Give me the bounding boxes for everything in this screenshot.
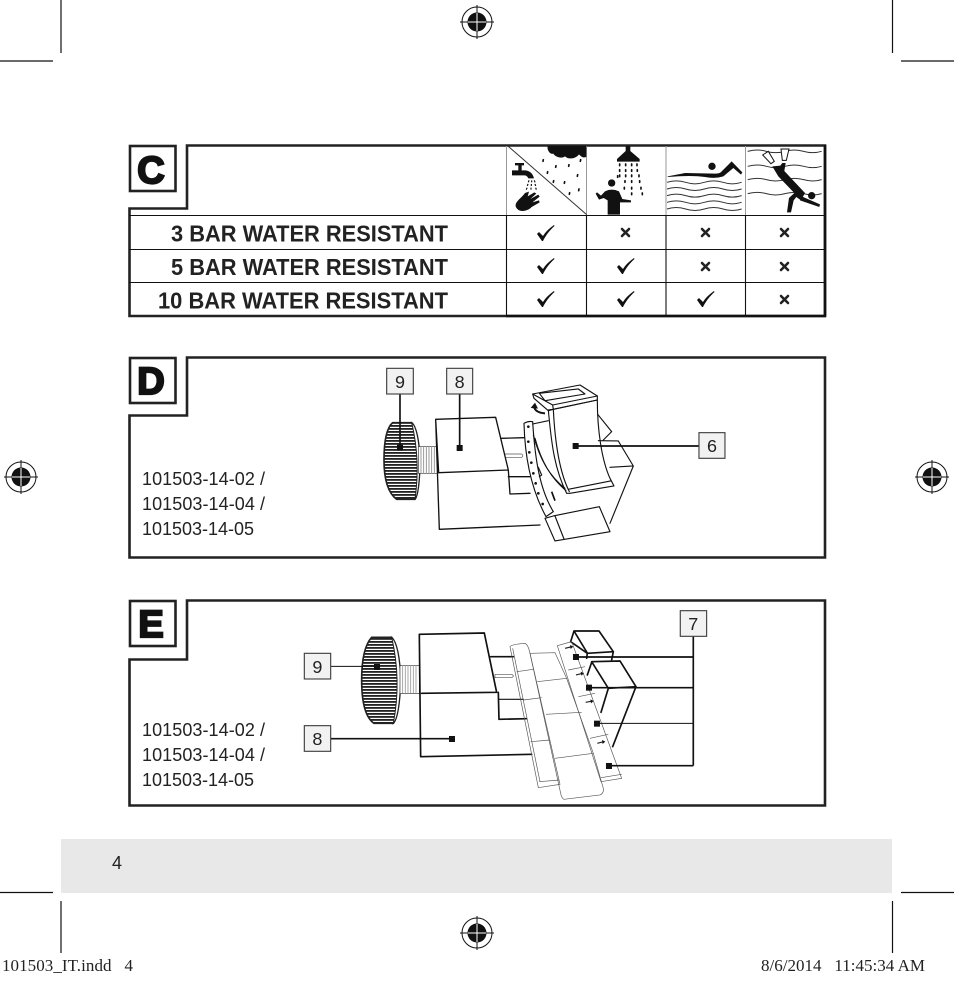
slug: file name: 101503_IT.indd 4 bbox=[2, 956, 134, 975]
callout 9: 9 bbox=[312, 657, 322, 677]
icon: shower bbox=[596, 146, 642, 215]
row: 3 bar: 3 BAR WATER RESISTANT bbox=[171, 220, 448, 246]
diagram: tool body with knob bbox=[384, 417, 540, 529]
lower strap bbox=[545, 507, 610, 541]
panel E letter bbox=[130, 601, 176, 646]
knob bbox=[362, 637, 401, 723]
row: 10 bar: 10 BAR WATER RESISTANT bbox=[158, 288, 448, 314]
callout 8 bbox=[304, 726, 455, 751]
callout 7: 7 bbox=[688, 614, 698, 634]
icon: tap and rain bbox=[508, 146, 587, 215]
callout 7 bbox=[573, 611, 707, 769]
registration mark: right bbox=[915, 460, 949, 494]
threaded screw bbox=[418, 447, 437, 473]
threaded screw bbox=[400, 666, 419, 694]
panel E letter: E bbox=[138, 604, 164, 646]
row: 3 bar bbox=[171, 220, 788, 246]
diagram: tool body with knob bbox=[362, 633, 532, 757]
middle strap bbox=[530, 653, 603, 799]
watch case bbox=[533, 385, 614, 493]
callout 9: 9 bbox=[395, 372, 405, 392]
left strap bbox=[510, 643, 560, 788]
diagram: watch on strap bbox=[524, 385, 633, 541]
panel E frame bbox=[130, 600, 825, 806]
panel E model numbers bbox=[142, 720, 265, 790]
icon: swimmer and waves bbox=[667, 161, 742, 210]
panel C letter: C bbox=[137, 150, 165, 192]
callout 8 bbox=[447, 368, 473, 451]
registration mark: left bbox=[4, 460, 38, 494]
panel E model numbers: 101503-14-05 bbox=[142, 770, 254, 790]
registration mark: bottom bbox=[460, 916, 494, 950]
table grid bbox=[129, 145, 826, 316]
right strap bbox=[557, 642, 622, 782]
panel D model numbers: 101503-14-05 bbox=[142, 519, 254, 539]
panel C frame bbox=[130, 146, 825, 316]
callout 9 bbox=[304, 653, 380, 679]
panel D model numbers: 101503-14-04 / bbox=[142, 494, 265, 514]
tool block bbox=[419, 633, 532, 757]
panel C letter bbox=[130, 146, 176, 192]
slot bbox=[505, 454, 523, 457]
row: 5 bar bbox=[171, 254, 788, 280]
row: 10 bar bbox=[158, 288, 788, 314]
panel D model numbers bbox=[142, 469, 265, 539]
callout 8: 8 bbox=[455, 372, 465, 392]
callout 6 bbox=[573, 433, 725, 458]
panel C: water resistance table bbox=[129, 145, 826, 316]
diagram: straps and blocks bbox=[510, 631, 636, 799]
small arrow bbox=[552, 492, 555, 501]
panel E model numbers: 101503-14-04 / bbox=[142, 745, 265, 765]
callouts panel D bbox=[387, 368, 725, 458]
strap edge lines bbox=[533, 421, 566, 491]
slot bbox=[495, 674, 513, 678]
panel E: strap diagram bbox=[130, 600, 825, 806]
tool block bbox=[436, 417, 540, 529]
strap arrows bbox=[565, 645, 605, 744]
registration mark: top bbox=[460, 5, 494, 39]
panel D frame bbox=[130, 358, 825, 558]
callout 6: 6 bbox=[707, 436, 717, 456]
row: 5 bar: 5 BAR WATER RESISTANT bbox=[171, 254, 448, 280]
callout 9 bbox=[387, 368, 413, 451]
strap with holes bbox=[524, 421, 553, 517]
callout 8: 8 bbox=[312, 729, 322, 749]
rear blocks bbox=[571, 631, 636, 747]
icon: diver bbox=[748, 149, 822, 212]
panel D: strap diagram bbox=[130, 358, 825, 558]
panel D model numbers: 101503-14-02 / bbox=[142, 469, 265, 489]
panel E model numbers: 101503-14-02 / bbox=[142, 720, 265, 740]
page number: 4 bbox=[112, 853, 122, 873]
rotation arrow bbox=[531, 403, 545, 413]
rear block bbox=[598, 414, 633, 523]
panel D letter: D bbox=[137, 361, 165, 403]
slug: date and time: 8/6/2014 11:45:34 AM bbox=[761, 956, 925, 975]
callouts panel E bbox=[304, 611, 707, 769]
knob bbox=[384, 423, 420, 499]
panel D letter bbox=[130, 358, 176, 403]
footer band bbox=[61, 839, 892, 893]
